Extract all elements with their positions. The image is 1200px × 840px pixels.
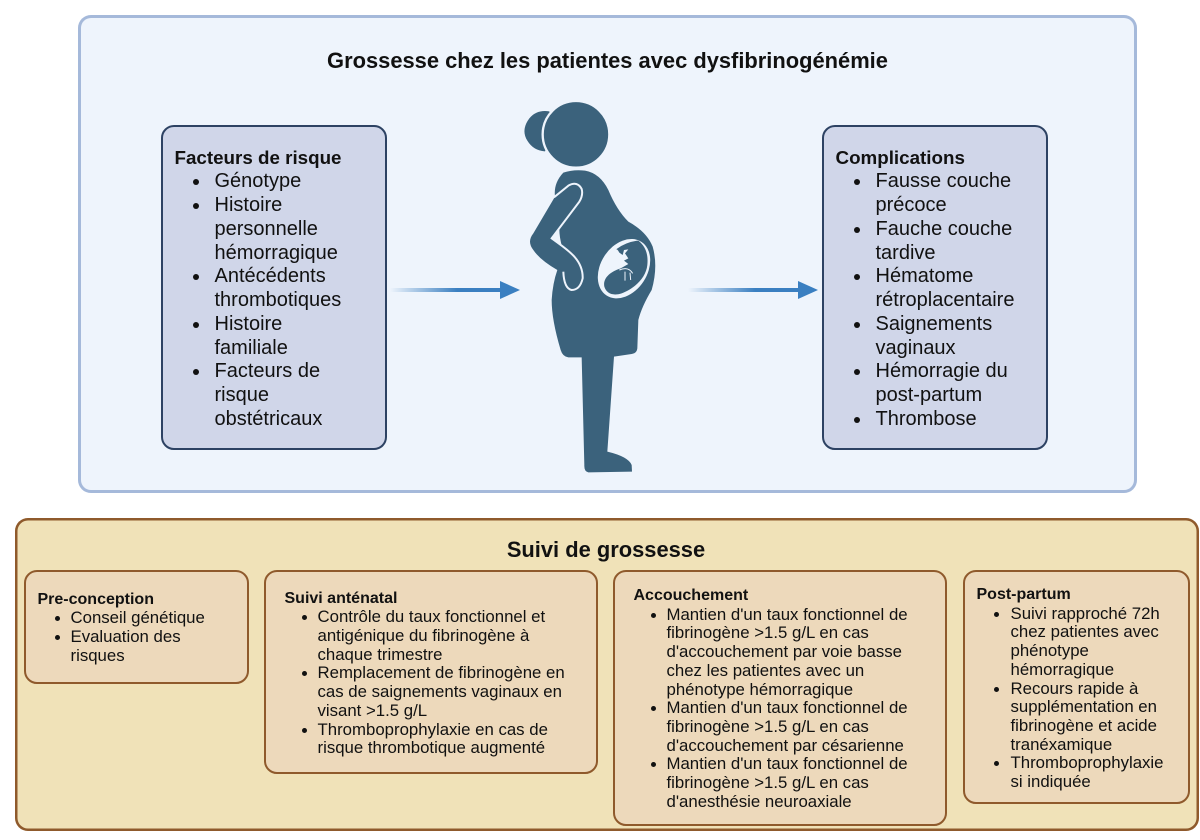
- text: pre-conception list: Conseil génétique: [70, 608, 205, 627]
- text: accouchement list: phénotype hémorragique: [666, 680, 853, 699]
- text: pre-conception list: risques: [70, 646, 125, 665]
- text: facteurs de risque list: Facteurs de: [214, 360, 320, 382]
- text: post-partum list: Suivi rapproché 72h: [1010, 604, 1160, 623]
- text: complications list: Saignements: [876, 313, 992, 335]
- text: suivi anténatal list: [284, 590, 565, 757]
- text: complications list: Hématome: [876, 265, 973, 287]
- panel: complications: [822, 125, 1048, 450]
- panel: post-partum: [963, 570, 1190, 804]
- text: pre-conception list: [38, 590, 205, 665]
- text: facteurs de risque list: Antécédents: [214, 265, 326, 287]
- text: suivi anténatal list: cas de saignements vaginaux en: [318, 682, 562, 701]
- text: suivi anténatal list: visant >1.5 g/L: [318, 701, 427, 720]
- panel: pre-conception: [24, 570, 249, 684]
- text: suivi anténatal list: Contrôle du taux fonctionnel et: [318, 607, 545, 626]
- arrow: risk factors to pregnancy: [393, 281, 520, 299]
- text: accouchement list: Mantien d'un taux fonctionnel de: [666, 698, 908, 717]
- text: suivi anténatal list: Thromboprophylaxie en cas de: [318, 720, 548, 739]
- text: post-partum list: fibrinogène et acide: [1010, 716, 1157, 735]
- text: accouchement list: d'anesthésie neuroaxiale: [666, 792, 852, 811]
- panel: suivi de grossesse: [15, 518, 1199, 831]
- text: facteurs de risque list: Histoire: [214, 313, 282, 335]
- text: complications list: Fausse couche: [876, 170, 1011, 192]
- text: suivi anténatal list: chaque trimestre: [318, 645, 442, 664]
- text: accouchement list: fibrinogène >1.5 g/L en cas: [666, 717, 869, 736]
- text: post-partum list: [976, 586, 1163, 791]
- panel: suivi anténatal: [264, 570, 598, 774]
- text: facteurs de risque list: personnelle: [214, 218, 318, 240]
- text: facteurs de risque list: thrombotiques: [214, 289, 341, 311]
- text: complications list: rétroplacentaire: [876, 289, 1014, 311]
- text: complications list: [836, 146, 1014, 430]
- panel: accouchement: [613, 570, 947, 826]
- text: accouchement list: fibrinogène >1.5 g/L en cas: [666, 623, 869, 642]
- text: post-partum list: tranéxamique: [1010, 735, 1112, 754]
- arm outline: [552, 184, 583, 290]
- text: complications list: tardive: [876, 242, 936, 264]
- text: accouchement list: Mantien d'un taux fonctionnel de: [666, 605, 908, 624]
- text: accouchement list: fibrinogène >1.5 g/L en cas: [666, 773, 869, 792]
- text: complications list: précoce: [876, 194, 947, 216]
- panel: grossesse overview: [78, 15, 1137, 493]
- text: accouchement list: Mantien d'un taux fonctionnel de: [666, 754, 908, 773]
- text: post-partum list: Post-partum: [976, 586, 1071, 603]
- text: post-partum list: hémorragique: [1010, 660, 1114, 679]
- title: Grossesse chez les patientes avec dysfibrinogénémie: [327, 48, 888, 73]
- text: post-partum list: Recours rapide à: [1010, 679, 1138, 698]
- text: facteurs de risque list: hémorragique: [214, 242, 338, 264]
- text: pre-conception list: Pre-conception: [38, 590, 154, 608]
- text: complications list: vaginaux: [876, 336, 956, 358]
- fetus: [587, 229, 661, 308]
- text: post-partum list: supplémentation en: [1010, 697, 1157, 716]
- text: suivi anténatal list: Suivi anténatal: [284, 590, 397, 606]
- text: pre-conception list: Evaluation des: [70, 627, 181, 646]
- text: complications list: Complications: [836, 146, 965, 168]
- text: facteurs de risque list: Histoire: [214, 194, 282, 216]
- text: facteurs de risque list: risque: [214, 384, 269, 406]
- arrow: pregnancy to complications: [691, 281, 818, 299]
- text: facteurs de risque list: familiale: [214, 336, 288, 358]
- text: complications list: Hémorragie du: [876, 360, 1008, 382]
- heading: suivi de grossesse: Suivi de grossesse: [507, 537, 705, 562]
- text: facteurs de risque list: Génotype: [214, 170, 301, 192]
- text: complications list: Thrombose: [876, 408, 977, 430]
- panel: facteurs de risque: [161, 125, 387, 450]
- text: post-partum list: chez patientes avec: [1010, 622, 1159, 641]
- text: post-partum list: Thromboprophylaxie: [1010, 753, 1163, 772]
- text: suivi anténatal list: risque thrombotique augmenté: [318, 738, 545, 757]
- text: facteurs de risque list: Facteurs de risque: [174, 146, 342, 168]
- head: [543, 101, 609, 168]
- text: accouchement list: d'accouchement par césarienne: [666, 736, 904, 755]
- text: facteurs de risque list: obstétricaux: [214, 408, 322, 430]
- text: accouchement list: chez les patientes avec un: [666, 661, 864, 680]
- text: accouchement list: Accouchement: [634, 587, 748, 604]
- text: complications list: Fauche couche: [876, 218, 1012, 240]
- text: accouchement list: [634, 587, 908, 811]
- text: complications list: post-partum: [876, 384, 982, 406]
- text: post-partum list: si indiquée: [1010, 772, 1091, 791]
- text: suivi anténatal list: Remplacement de fibrinogène en: [318, 663, 565, 682]
- text: post-partum list: phénotype: [1010, 641, 1089, 660]
- text: facteurs de risque list: [174, 146, 342, 430]
- text: suivi anténatal list: antigénique du fibrinogène à: [318, 626, 529, 645]
- hair bun: [524, 111, 553, 151]
- text: accouchement list: d'accouchement par voie basse: [666, 642, 902, 661]
- icon: pregnant woman silhouette: [524, 102, 656, 472]
- body: [530, 170, 655, 472]
